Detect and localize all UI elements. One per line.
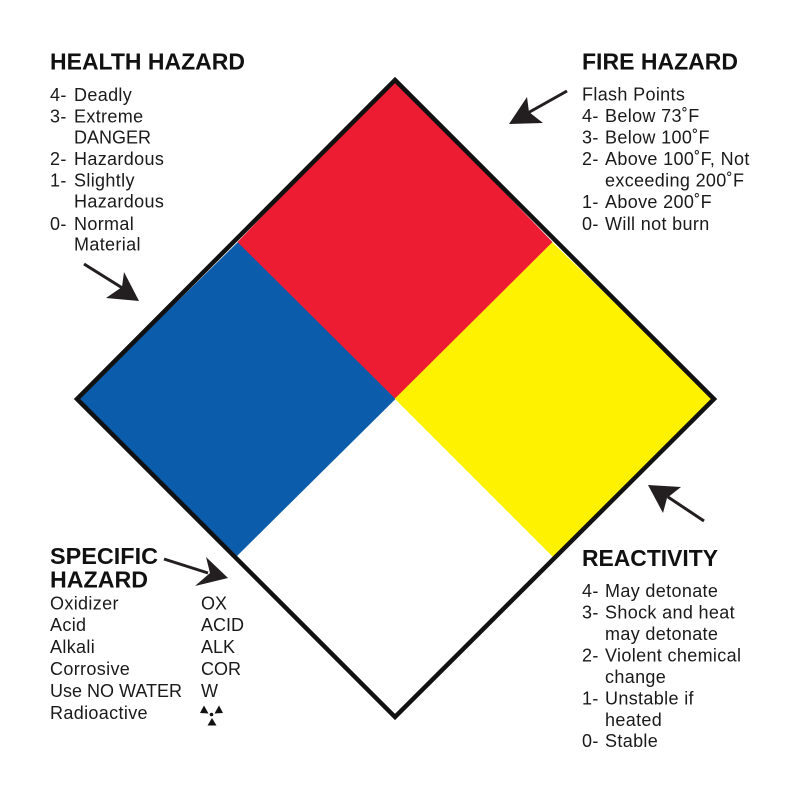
flash point levels: Above 200˚F: [605, 192, 712, 212]
arrow: to yellow quadrant: [648, 485, 704, 521]
specific hazard table: OX: [201, 594, 227, 614]
health hazard levels: Deadly: [74, 85, 132, 105]
flash point levels: Will not burn: [605, 214, 710, 234]
reactivity levels: 2-: [582, 646, 599, 666]
reactivity levels: Violent chemical: [605, 646, 741, 666]
reactivity levels: change: [605, 667, 666, 687]
reactivity levels: [582, 581, 741, 751]
health hazard levels: Normal: [74, 214, 134, 234]
panel: specific hazard: [50, 543, 244, 726]
heading: fire hazard: FIRE HAZARD: [582, 48, 738, 74]
health hazard levels: 3-: [50, 106, 67, 126]
quadrant: blue health: [78, 241, 396, 556]
specific hazard table: Radioactive: [50, 703, 148, 723]
panel: health hazard: [50, 48, 245, 301]
specific hazard table: COR: [201, 659, 241, 679]
reactivity levels: May detonate: [605, 581, 718, 601]
health hazard levels: Slightly: [74, 171, 135, 191]
arrow: to blue quadrant: [84, 264, 139, 301]
arrow: to red quadrant: [509, 91, 567, 124]
flash point levels: 4-: [582, 106, 599, 126]
specific hazard table: W: [201, 681, 218, 701]
flash point levels: exceeding 200˚F: [605, 170, 744, 190]
reactivity levels: 3-: [582, 602, 599, 622]
heading: reactivity: REACTIVITY: [582, 545, 718, 571]
flash point levels: 1-: [582, 192, 599, 212]
flash point levels: Above 100˚F, Not: [605, 149, 750, 169]
quadrant: yellow reactivity: [394, 241, 714, 557]
health hazard levels: [50, 85, 164, 255]
specific hazard table: Acid: [50, 615, 86, 635]
panel: reactivity: [582, 485, 741, 751]
flash point levels: 2-: [582, 149, 599, 169]
health hazard levels: 1-: [50, 171, 67, 191]
panel: fire hazard: [509, 48, 750, 234]
specific hazard table: ALK: [201, 637, 235, 657]
reactivity levels: 0-: [582, 731, 599, 751]
reactivity levels: Stable: [605, 731, 658, 751]
hazard diamond: [77, 79, 714, 717]
reactivity levels: may detonate: [605, 624, 718, 644]
flash point levels: Flash Points: [582, 85, 685, 105]
health hazard levels: DANGER: [74, 128, 151, 148]
health hazard levels: 4-: [50, 85, 67, 105]
health hazard levels: Hazardous: [74, 149, 164, 169]
reactivity levels: 1-: [582, 688, 599, 708]
health hazard levels: Extreme: [74, 106, 143, 126]
specific hazard table: Use NO WATER: [50, 681, 182, 701]
flash point levels: Below 100˚F: [605, 128, 710, 148]
reactivity levels: Shock and heat: [605, 602, 735, 622]
flash point levels: Below 73˚F: [605, 106, 700, 126]
specific hazard table: Corrosive: [50, 659, 130, 679]
health hazard levels: Hazardous: [74, 192, 164, 212]
icon: radiation symbol: [200, 706, 223, 726]
flash point levels: [582, 85, 750, 234]
specific hazard table: [50, 594, 244, 723]
flash point levels: 0-: [582, 214, 599, 234]
flash point levels: 3-: [582, 128, 599, 148]
reactivity levels: Unstable if: [605, 688, 695, 708]
specific hazard table: Alkali: [50, 637, 95, 657]
quadrant: red fire: [238, 79, 552, 398]
panel: specific hazard: HAZARD: [50, 567, 148, 593]
health hazard levels: 2-: [50, 149, 67, 169]
arrow: to white quadrant: [164, 557, 228, 586]
diamond outline: [77, 80, 714, 717]
reactivity levels: heated: [605, 710, 662, 730]
reactivity levels: 4-: [582, 581, 599, 601]
specific hazard table: ACID: [201, 615, 244, 635]
specific hazard table: Oxidizer: [50, 594, 119, 614]
health hazard levels: 0-: [50, 214, 67, 234]
heading: specific hazard: SPECIFIC: [50, 543, 158, 569]
health hazard levels: Material: [74, 235, 141, 255]
heading: health hazard: HEALTH HAZARD: [50, 48, 245, 74]
